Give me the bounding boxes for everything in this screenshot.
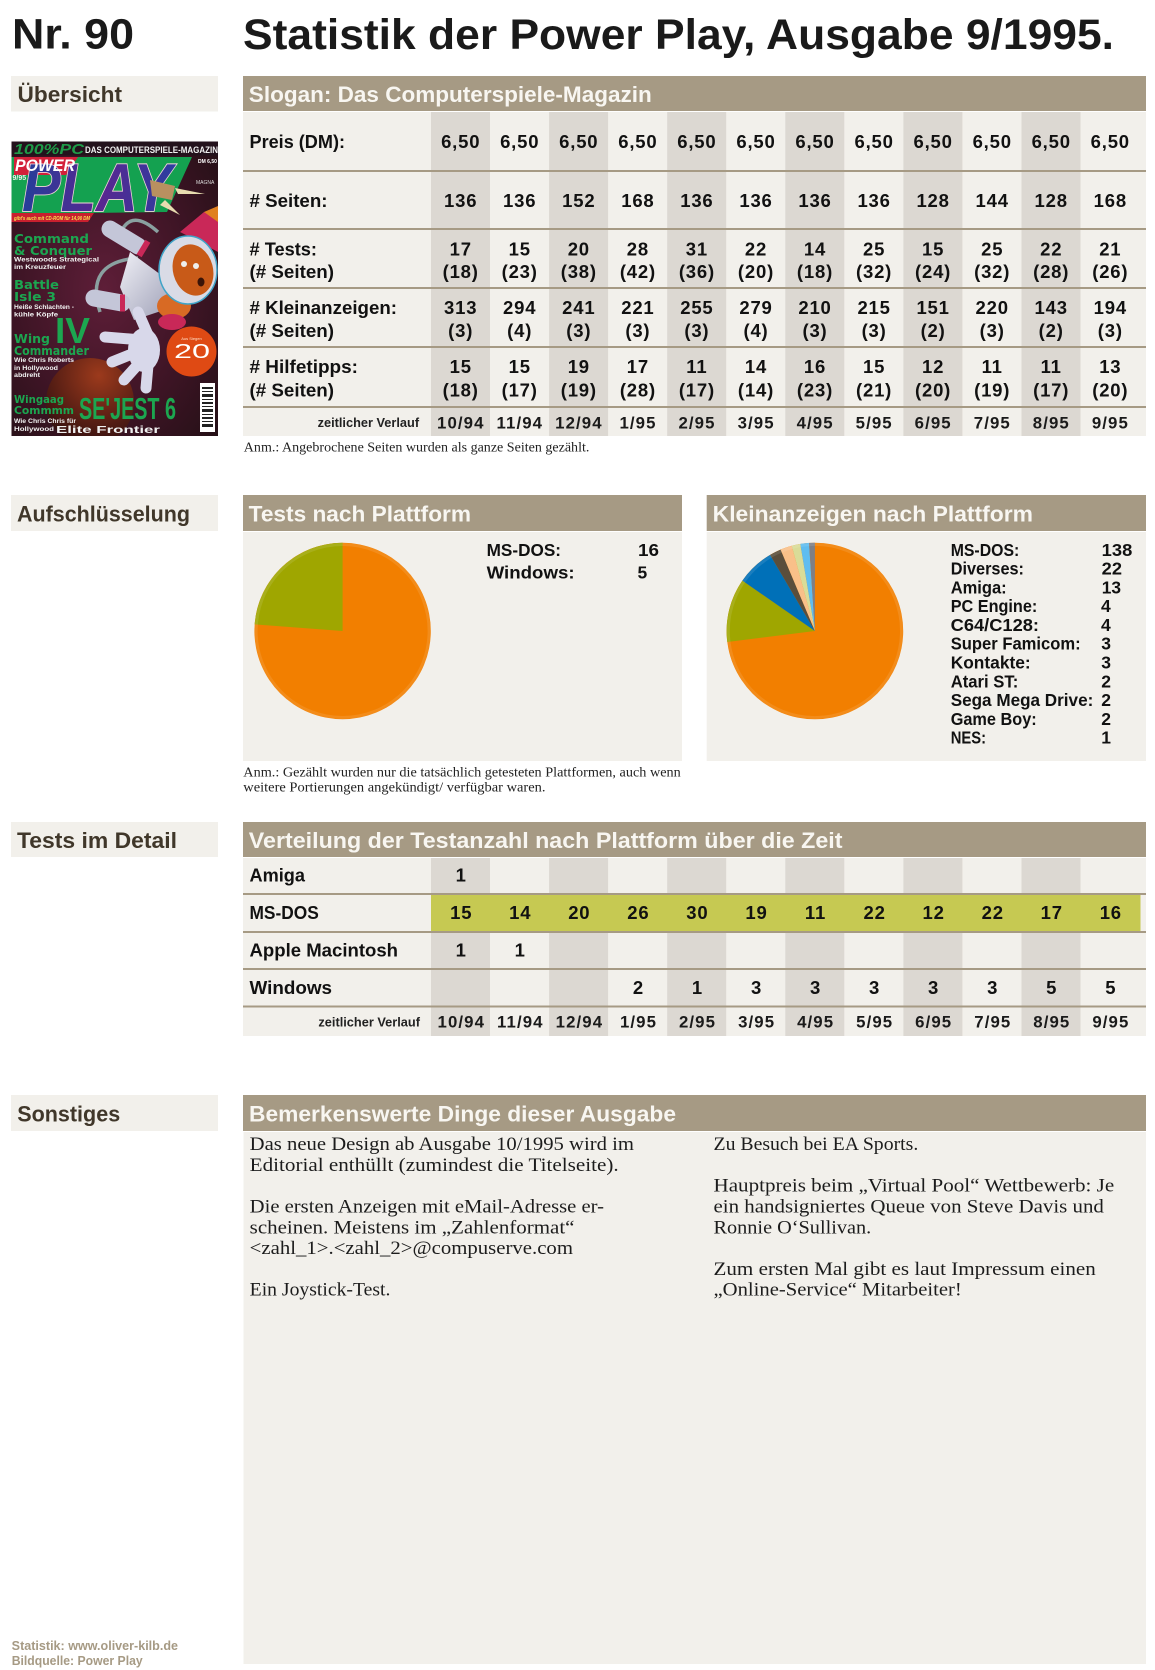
row: Kleinanzeigen: 143 xyxy=(1035,297,1068,318)
row: Kleinanzeigen: 255 xyxy=(680,297,714,318)
row: zeitlicher Verlauf: 2/95 xyxy=(679,1013,716,1032)
row: Kleinanzeigen: (3) xyxy=(448,320,473,341)
page title: issue number: Nr. 90 xyxy=(12,10,134,58)
legend: tests: 16 xyxy=(638,540,659,560)
section label: Sonstiges xyxy=(11,1095,218,1131)
row: Kleinanzeigen: 215 xyxy=(857,297,891,318)
row: zeitlicher Verlauf: 7/95 xyxy=(974,414,1011,433)
row: zeitlicher Verlauf: zeitlicher Verlauf xyxy=(318,416,420,430)
row: MS-DOS: 22 xyxy=(864,902,886,923)
cover headlines: Wie Chris Roberts xyxy=(14,357,74,364)
legend: Kleinanzeigen: 1 xyxy=(1101,728,1111,748)
row: Kleinanzeigen: (4) xyxy=(507,320,532,341)
cover masthead: PLAY xyxy=(22,150,177,226)
row: Apple Macintosh xyxy=(250,940,526,961)
row: zeitlicher Verlauf: 3/95 xyxy=(738,1013,775,1032)
cover masthead xyxy=(12,142,218,213)
cover badge xyxy=(166,326,216,376)
text column left: Ein Joystick-Test. xyxy=(250,1280,390,1301)
row: Hilfetipps: 15 xyxy=(863,356,885,377)
row: Hilfetipps: 11 xyxy=(1041,356,1062,377)
row: Tests: (28) xyxy=(1033,261,1069,282)
row: MS-DOS: 12 xyxy=(923,902,945,923)
table header: slogan: Slogan: Das Computerspiele-Magazin xyxy=(249,82,652,107)
row: Seiten: 136 xyxy=(857,190,891,211)
row: Seiten: 168 xyxy=(621,190,655,211)
legend: Kleinanzeigen: 22 xyxy=(1102,559,1122,579)
row: Tests: 21 xyxy=(1099,238,1121,259)
row: Preis: 6,50 xyxy=(500,131,539,152)
cover headlines: abdreht xyxy=(14,372,41,379)
row: Hilfetipps: 11 xyxy=(982,356,1003,377)
cover headlines xyxy=(14,232,176,436)
row: Tests: 25 xyxy=(863,238,885,259)
row: Windows: 5 xyxy=(1105,977,1116,998)
row: Preis: 6,50 xyxy=(795,131,835,152)
row: Seiten: 128 xyxy=(916,190,950,211)
row: Apple Macintosh: Apple Macintosh xyxy=(250,940,398,961)
panel header xyxy=(243,495,682,531)
cover headlines: Wing xyxy=(14,332,50,346)
legend: Kleinanzeigen: Atari ST: xyxy=(951,671,1018,691)
footnote: Plattformen: weitere Portierungen angekündigt/ verfügbar waren. xyxy=(243,779,546,794)
cover headlines: Battle xyxy=(14,278,59,292)
row: Preis: Preis (DM): xyxy=(250,131,345,152)
cover headlines: IV xyxy=(55,310,90,351)
row: Hilfetipps: (20) xyxy=(915,379,951,400)
cover headlines: SE'JEST 6 xyxy=(79,391,176,426)
panel: Bemerkenswerte Dinge xyxy=(243,1095,1146,1664)
row: Windows: 3 xyxy=(751,977,762,998)
row: Windows: 3 xyxy=(987,977,998,998)
legend: Kleinanzeigen: 2 xyxy=(1101,671,1111,691)
text column right: Zum ersten Mal gibt es laut Impressum einen xyxy=(714,1259,1096,1280)
cover headlines: im Kreuzfeuer xyxy=(14,264,67,271)
pie chart: tests xyxy=(254,543,431,719)
cover glove xyxy=(105,312,160,388)
row: Preis: 6,50 xyxy=(1032,131,1071,152)
cover masthead: MAGNA xyxy=(196,180,215,186)
row: Kleinanzeigen: (3) xyxy=(980,320,1005,341)
row: MS-DOS: 22 xyxy=(982,902,1004,923)
row: Hilfetipps: (19) xyxy=(974,379,1010,400)
row: Kleinanzeigen: 210 xyxy=(798,297,832,318)
cover spaceship xyxy=(150,180,205,215)
section label: Aufschlüsselung xyxy=(11,495,218,531)
row: Kleinanzeigen: 151 xyxy=(916,297,950,318)
row: Tests: 22 xyxy=(745,238,767,259)
row: Preis: 6,50 xyxy=(677,131,717,152)
row: Tests: (24) xyxy=(915,261,951,282)
row: Hilfetipps: (18) xyxy=(443,379,479,400)
row: Seiten: 136 xyxy=(798,190,832,211)
row: Kleinanzeigen xyxy=(250,297,1127,341)
cover badge: Aus Siegen xyxy=(181,336,202,341)
footer credits xyxy=(12,1639,178,1668)
text column right: Zu Besuch bei EA Sports. xyxy=(714,1134,918,1155)
legend: Kleinanzeigen: Sega Mega Drive: xyxy=(951,690,1093,710)
footnote: Übersicht: Anm.: Angebrochene Seiten wurden als ganze Seiten gezählt. xyxy=(244,439,589,454)
legend: Kleinanzeigen: Super Famicom: xyxy=(951,634,1081,654)
row: MS-DOS: 20 xyxy=(568,902,590,923)
legend: Kleinanzeigen xyxy=(951,540,1133,748)
footnote: Plattformen xyxy=(243,764,681,794)
row: MS-DOS: 11 xyxy=(805,902,826,923)
panel: Tests nach Plattform xyxy=(243,495,682,761)
cover CD-ROM strip xyxy=(12,213,94,222)
table header: Verteilung der Testanzahl nach Plattform über die Zeit xyxy=(249,828,843,853)
row: Preis: 6,50 xyxy=(973,131,1012,152)
cover headlines: Commander xyxy=(14,344,89,358)
row: Seiten: # Seiten: xyxy=(250,190,328,211)
row: Preis: 6,50 xyxy=(1091,131,1130,152)
row: Tests: (18) xyxy=(443,261,479,282)
legend: Kleinanzeigen: 13 xyxy=(1102,577,1121,597)
row: Hilfetipps: 15 xyxy=(509,356,531,377)
legend: Kleinanzeigen: 138 xyxy=(1102,540,1133,560)
cover masthead: 100%PC xyxy=(14,141,85,158)
text column left: Die ersten Anzeigen mit eMail-Adresse er- xyxy=(250,1196,604,1217)
cover headlines: kühle Köpfe xyxy=(14,312,59,318)
legend: tests: Windows: xyxy=(487,562,575,582)
magazine cover image xyxy=(12,141,219,446)
row: Preis: 6,50 xyxy=(736,131,776,152)
section label: Tests im Detail: Tests im Detail xyxy=(17,828,177,853)
row: Seiten: 136 xyxy=(680,190,714,211)
row: zeitlicher Verlauf: 9/95 xyxy=(1092,414,1129,433)
row: Hilfetipps: 15 xyxy=(450,356,472,377)
cover headlines: Heiße Schlachten - xyxy=(14,304,74,311)
row: Seiten: 168 xyxy=(1094,190,1127,211)
row: Preis: 6,50 xyxy=(854,131,894,152)
row: zeitlicher Verlauf: 9/95 xyxy=(1092,1013,1129,1032)
row: Kleinanzeigen: (3) xyxy=(802,320,828,341)
row: zeitlicher Verlauf: 10/94 xyxy=(438,1013,485,1032)
row: zeitlicher Verlauf: 8/95 xyxy=(1033,414,1070,433)
row: Kleinanzeigen: 279 xyxy=(739,297,773,318)
row: Kleinanzeigen: 221 xyxy=(621,297,655,318)
row: Tests: 31 xyxy=(686,238,708,259)
row: Tests: (42) xyxy=(620,261,656,282)
legend: tests: MS-DOS: xyxy=(487,540,561,560)
row: Tests: 17 xyxy=(450,238,472,259)
row: Hilfetipps: (19) xyxy=(561,379,597,400)
legend: tests xyxy=(487,540,659,582)
text column right xyxy=(714,1134,1114,1301)
row: Hilfetipps: # Hilfetipps: xyxy=(250,356,358,377)
cover headlines: Wie Chris Chris für xyxy=(14,418,77,425)
row: Kleinanzeigen: 313 xyxy=(444,297,477,318)
cover astronaut xyxy=(94,206,219,330)
row: Tests: 15 xyxy=(922,238,944,259)
row: Kleinanzeigen: 294 xyxy=(503,297,536,318)
cover CD-ROM strip: gibt's auch mit CD-ROM für 14,90 DM xyxy=(13,216,90,222)
panel header xyxy=(243,1095,1146,1131)
row: Tests: (20) xyxy=(738,261,774,282)
row: Tests: 22 xyxy=(1040,238,1062,259)
panel: Verteilung der Testanzahl xyxy=(243,822,1146,1036)
row: Tests: 15 xyxy=(509,238,531,259)
row: Kleinanzeigen: (3) xyxy=(625,320,650,341)
row: zeitlicher Verlauf: 12/94 xyxy=(555,414,603,433)
legend: Kleinanzeigen: 3 xyxy=(1101,652,1111,672)
row: Preis: 6,50 xyxy=(559,131,598,152)
row: Apple Macintosh: 1 xyxy=(515,940,526,961)
row: zeitlicher Verlauf: 11/94 xyxy=(497,1013,544,1032)
cover masthead: 9/95 xyxy=(12,175,26,182)
legend: Kleinanzeigen: 4 xyxy=(1101,596,1111,616)
row: Windows: 3 xyxy=(810,977,821,998)
row: Windows: 5 xyxy=(1046,977,1057,998)
row: Hilfetipps: (28) xyxy=(620,379,656,400)
row: Windows: 1 xyxy=(692,977,703,998)
row: MS-DOS: 15 xyxy=(450,902,472,923)
text column right: Ronnie O‘Sullivan. xyxy=(714,1217,871,1238)
text column left xyxy=(250,1134,634,1301)
text column left: <zahl_1>.<zahl_2>@compuserve.com xyxy=(250,1238,573,1259)
legend: Kleinanzeigen: 3 xyxy=(1101,634,1111,654)
row: MS-DOS: 16 xyxy=(1100,902,1122,923)
row: Hilfetipps: (20) xyxy=(1092,379,1128,400)
row: Hilfetipps: 16 xyxy=(804,356,826,377)
footnote: Plattformen: Anm.: Gezählt wurden nur die tatsächlich getesteten Plattformen, auch wenn xyxy=(243,764,681,779)
row: Hilfetipps: (17) xyxy=(502,379,538,400)
cover headlines: Elite Frontier xyxy=(56,425,160,436)
row: Kleinanzeigen: # Kleinanzeigen: xyxy=(250,297,397,318)
section label: Aufschlüsselung: Aufschlüsselung xyxy=(17,502,190,527)
legend: tests: 5 xyxy=(638,562,648,582)
row: Kleinanzeigen: 241 xyxy=(562,297,595,318)
row: Tests: (26) xyxy=(1092,261,1128,282)
row: Tests: 14 xyxy=(804,238,826,259)
row: Seiten: 152 xyxy=(562,190,595,211)
text column right: ein handsigniertes Queue von Steve Davis und xyxy=(714,1196,1104,1217)
cover planet xyxy=(46,358,134,436)
row: Apple Macintosh: 1 xyxy=(456,940,467,961)
cover headlines: & Conquer xyxy=(14,244,92,258)
row: Seiten: 144 xyxy=(976,190,1009,211)
row: Hilfetipps: (21) xyxy=(856,379,892,400)
row: Kleinanzeigen: (3) xyxy=(684,320,709,341)
row: Kleinanzeigen: 220 xyxy=(976,297,1009,318)
row: Tests: 20 xyxy=(568,238,590,259)
row: Kleinanzeigen: (3) xyxy=(566,320,591,341)
row: Kleinanzeigen: (2) xyxy=(1039,320,1064,341)
legend: Kleinanzeigen: Amiga: xyxy=(951,577,1007,597)
table header: slogan xyxy=(243,76,1146,111)
row: Hilfetipps: (14) xyxy=(738,379,774,400)
text column left: scheinen. Meistens im „Zahlenformat“ xyxy=(250,1217,574,1238)
row: Seiten: 136 xyxy=(739,190,773,211)
cover badge: 20 xyxy=(174,341,210,363)
row: zeitlicher Verlauf: 7/95 xyxy=(974,1013,1011,1032)
row: Tests: # Tests: xyxy=(250,238,317,259)
legend: Kleinanzeigen: Kontakte: xyxy=(951,652,1031,672)
cover masthead: DAS COMPUTERSPIELE-MAGAZIN xyxy=(85,145,218,156)
row: zeitlicher Verlauf: 12/94 xyxy=(556,1013,603,1032)
row: Windows: Windows xyxy=(250,977,332,998)
row: Hilfetipps xyxy=(250,356,1128,400)
row: Kleinanzeigen: 194 xyxy=(1094,297,1127,318)
panel header xyxy=(707,495,1146,531)
panel header: Tests nach Plattform xyxy=(249,502,471,527)
row: Seiten: 136 xyxy=(503,190,536,211)
row: Preis: 6,50 xyxy=(913,131,953,152)
cover headlines: Isle 3 xyxy=(14,290,56,304)
row: Amiga xyxy=(250,865,467,886)
row: Hilfetipps: 14 xyxy=(745,356,767,377)
row: Seiten xyxy=(250,190,1127,211)
row: Amiga: 1 xyxy=(456,865,467,886)
legend: Kleinanzeigen: C64/C128: xyxy=(951,615,1039,635)
footer credits: Bildquelle: Power Play xyxy=(12,1654,143,1668)
row: Hilfetipps: (23) xyxy=(797,379,833,400)
row: Preis xyxy=(250,131,1130,152)
row: MS-DOS: 17 xyxy=(1041,902,1063,923)
row: MS-DOS: 26 xyxy=(627,902,649,923)
row: zeitlicher Verlauf: 1/95 xyxy=(619,414,657,433)
panel header: Kleinanzeigen nach Plattform xyxy=(713,502,1033,527)
section label: Übersicht xyxy=(11,76,218,112)
row: Windows: 2 xyxy=(633,977,644,998)
row: zeitlicher Verlauf xyxy=(318,414,1129,433)
row: Windows: 3 xyxy=(928,977,939,998)
row: Hilfetipps: 13 xyxy=(1099,356,1121,377)
cover headlines: Hollywood xyxy=(14,426,54,433)
row: Seiten: 128 xyxy=(1035,190,1068,211)
row: Tests: 25 xyxy=(981,238,1003,259)
table header xyxy=(243,822,1146,857)
legend: Kleinanzeigen: 2 xyxy=(1101,709,1111,729)
row: Tests: (32) xyxy=(974,261,1010,282)
row: Amiga: Amiga xyxy=(250,865,306,886)
row: Tests: (18) xyxy=(797,261,833,282)
row: zeitlicher Verlauf: 10/94 xyxy=(437,414,485,433)
panel header: Bemerkenswerte Dinge dieser Ausgabe xyxy=(249,1101,676,1126)
row: Tests: (# Seiten) xyxy=(250,261,334,282)
legend: Kleinanzeigen: Game Boy: xyxy=(951,709,1037,729)
row: MS-DOS: 14 xyxy=(509,902,531,923)
section label: Sonstiges: Sonstiges xyxy=(17,1101,120,1126)
pie chart: Kleinanzeigen xyxy=(727,543,903,719)
row: zeitlicher Verlauf: 11/94 xyxy=(497,414,543,433)
row: Tests: (32) xyxy=(856,261,892,282)
text column left: Editorial enthüllt (zumindest die Titelseite). xyxy=(250,1155,619,1176)
row: zeitlicher Verlauf: 4/95 xyxy=(797,1013,834,1032)
row: MS-DOS xyxy=(250,902,1122,923)
cover masthead: POWER xyxy=(15,156,76,175)
row: zeitlicher Verlauf: 2/95 xyxy=(678,414,716,433)
row: Tests: (23) xyxy=(502,261,538,282)
footer credits: Statistik: www.oliver-kilb.de xyxy=(12,1639,178,1653)
row: Hilfetipps: (17) xyxy=(1033,379,1069,400)
row: zeitlicher Verlauf: 1/95 xyxy=(620,1013,657,1032)
row: Hilfetipps: 11 xyxy=(686,356,707,377)
row: Kleinanzeigen: (4) xyxy=(743,320,769,341)
cover masthead: DM 6,50 xyxy=(198,159,217,165)
row: Tests: 28 xyxy=(627,238,649,259)
row: Tests: (36) xyxy=(679,261,715,282)
row: Seiten: 136 xyxy=(444,190,477,211)
row: zeitlicher Verlauf: 4/95 xyxy=(797,414,834,433)
row: zeitlicher Verlauf: zeitlicher Verlauf xyxy=(318,1016,421,1030)
text column right: Hauptpreis beim „Virtual Pool“ Wettbewerb: Je xyxy=(714,1176,1114,1197)
row: Kleinanzeigen: (3) xyxy=(862,320,887,341)
row: MS-DOS: 30 xyxy=(686,902,708,923)
row: Preis: 6,50 xyxy=(441,131,480,152)
page title: Statistik der Power Play, Ausgabe 9/1995. xyxy=(243,11,1114,59)
cover headlines: Command xyxy=(14,232,89,246)
row: Windows: 3 xyxy=(869,977,880,998)
row: Windows xyxy=(250,977,1116,998)
panel: Übersicht table xyxy=(243,76,1146,436)
row: Tests: (38) xyxy=(561,261,597,282)
row: Hilfetipps: (# Seiten) xyxy=(250,379,334,400)
legend: Kleinanzeigen: NES: xyxy=(951,728,986,748)
section label: Übersicht: Übersicht xyxy=(18,82,123,107)
panel: Kleinanzeigen nach Plattform xyxy=(707,495,1146,761)
cover headlines: Wingaag xyxy=(14,393,64,406)
legend: Kleinanzeigen: Diverses: xyxy=(951,559,1024,579)
row: Kleinanzeigen: (2) xyxy=(921,320,946,341)
row: zeitlicher Verlauf: 3/95 xyxy=(738,414,775,433)
cover headlines: in Hollywood xyxy=(14,365,58,372)
legend: Kleinanzeigen: MS-DOS: xyxy=(951,540,1019,560)
row: Hilfetipps: 19 xyxy=(568,356,590,377)
row: zeitlicher Verlauf: 6/95 xyxy=(915,414,952,433)
legend: Kleinanzeigen: 2 xyxy=(1101,690,1111,710)
text column right: „Online-Service“ Mitarbeiter! xyxy=(714,1280,962,1301)
cover headlines: Commmm xyxy=(14,404,74,417)
row: zeitlicher Verlauf: 5/95 xyxy=(856,414,893,433)
row: Kleinanzeigen: (# Seiten) xyxy=(250,320,334,341)
row: Hilfetipps: 12 xyxy=(922,356,944,377)
row: zeitlicher Verlauf: 5/95 xyxy=(856,1013,893,1032)
cover headlines: Westwoods Strategical xyxy=(14,256,99,264)
row: MS-DOS: MS-DOS xyxy=(250,902,319,923)
row: Tests xyxy=(250,238,1128,282)
section label: Tests im Detail xyxy=(11,822,218,857)
row: MS-DOS: 19 xyxy=(745,902,768,923)
row: zeitlicher Verlauf: 6/95 xyxy=(915,1013,952,1032)
row: Kleinanzeigen: (3) xyxy=(1098,320,1123,341)
text column left: Das neue Design ab Ausgabe 10/1995 wird im xyxy=(250,1134,634,1155)
row: Hilfetipps: (17) xyxy=(679,379,715,400)
legend: Kleinanzeigen: 4 xyxy=(1101,615,1111,635)
row: zeitlicher Verlauf xyxy=(318,1013,1129,1032)
row: Hilfetipps: 17 xyxy=(627,356,649,377)
row: Preis: 6,50 xyxy=(618,131,658,152)
row: zeitlicher Verlauf: 8/95 xyxy=(1033,1013,1070,1032)
cover barcode xyxy=(200,383,215,432)
legend: Kleinanzeigen: PC Engine: xyxy=(951,596,1037,616)
